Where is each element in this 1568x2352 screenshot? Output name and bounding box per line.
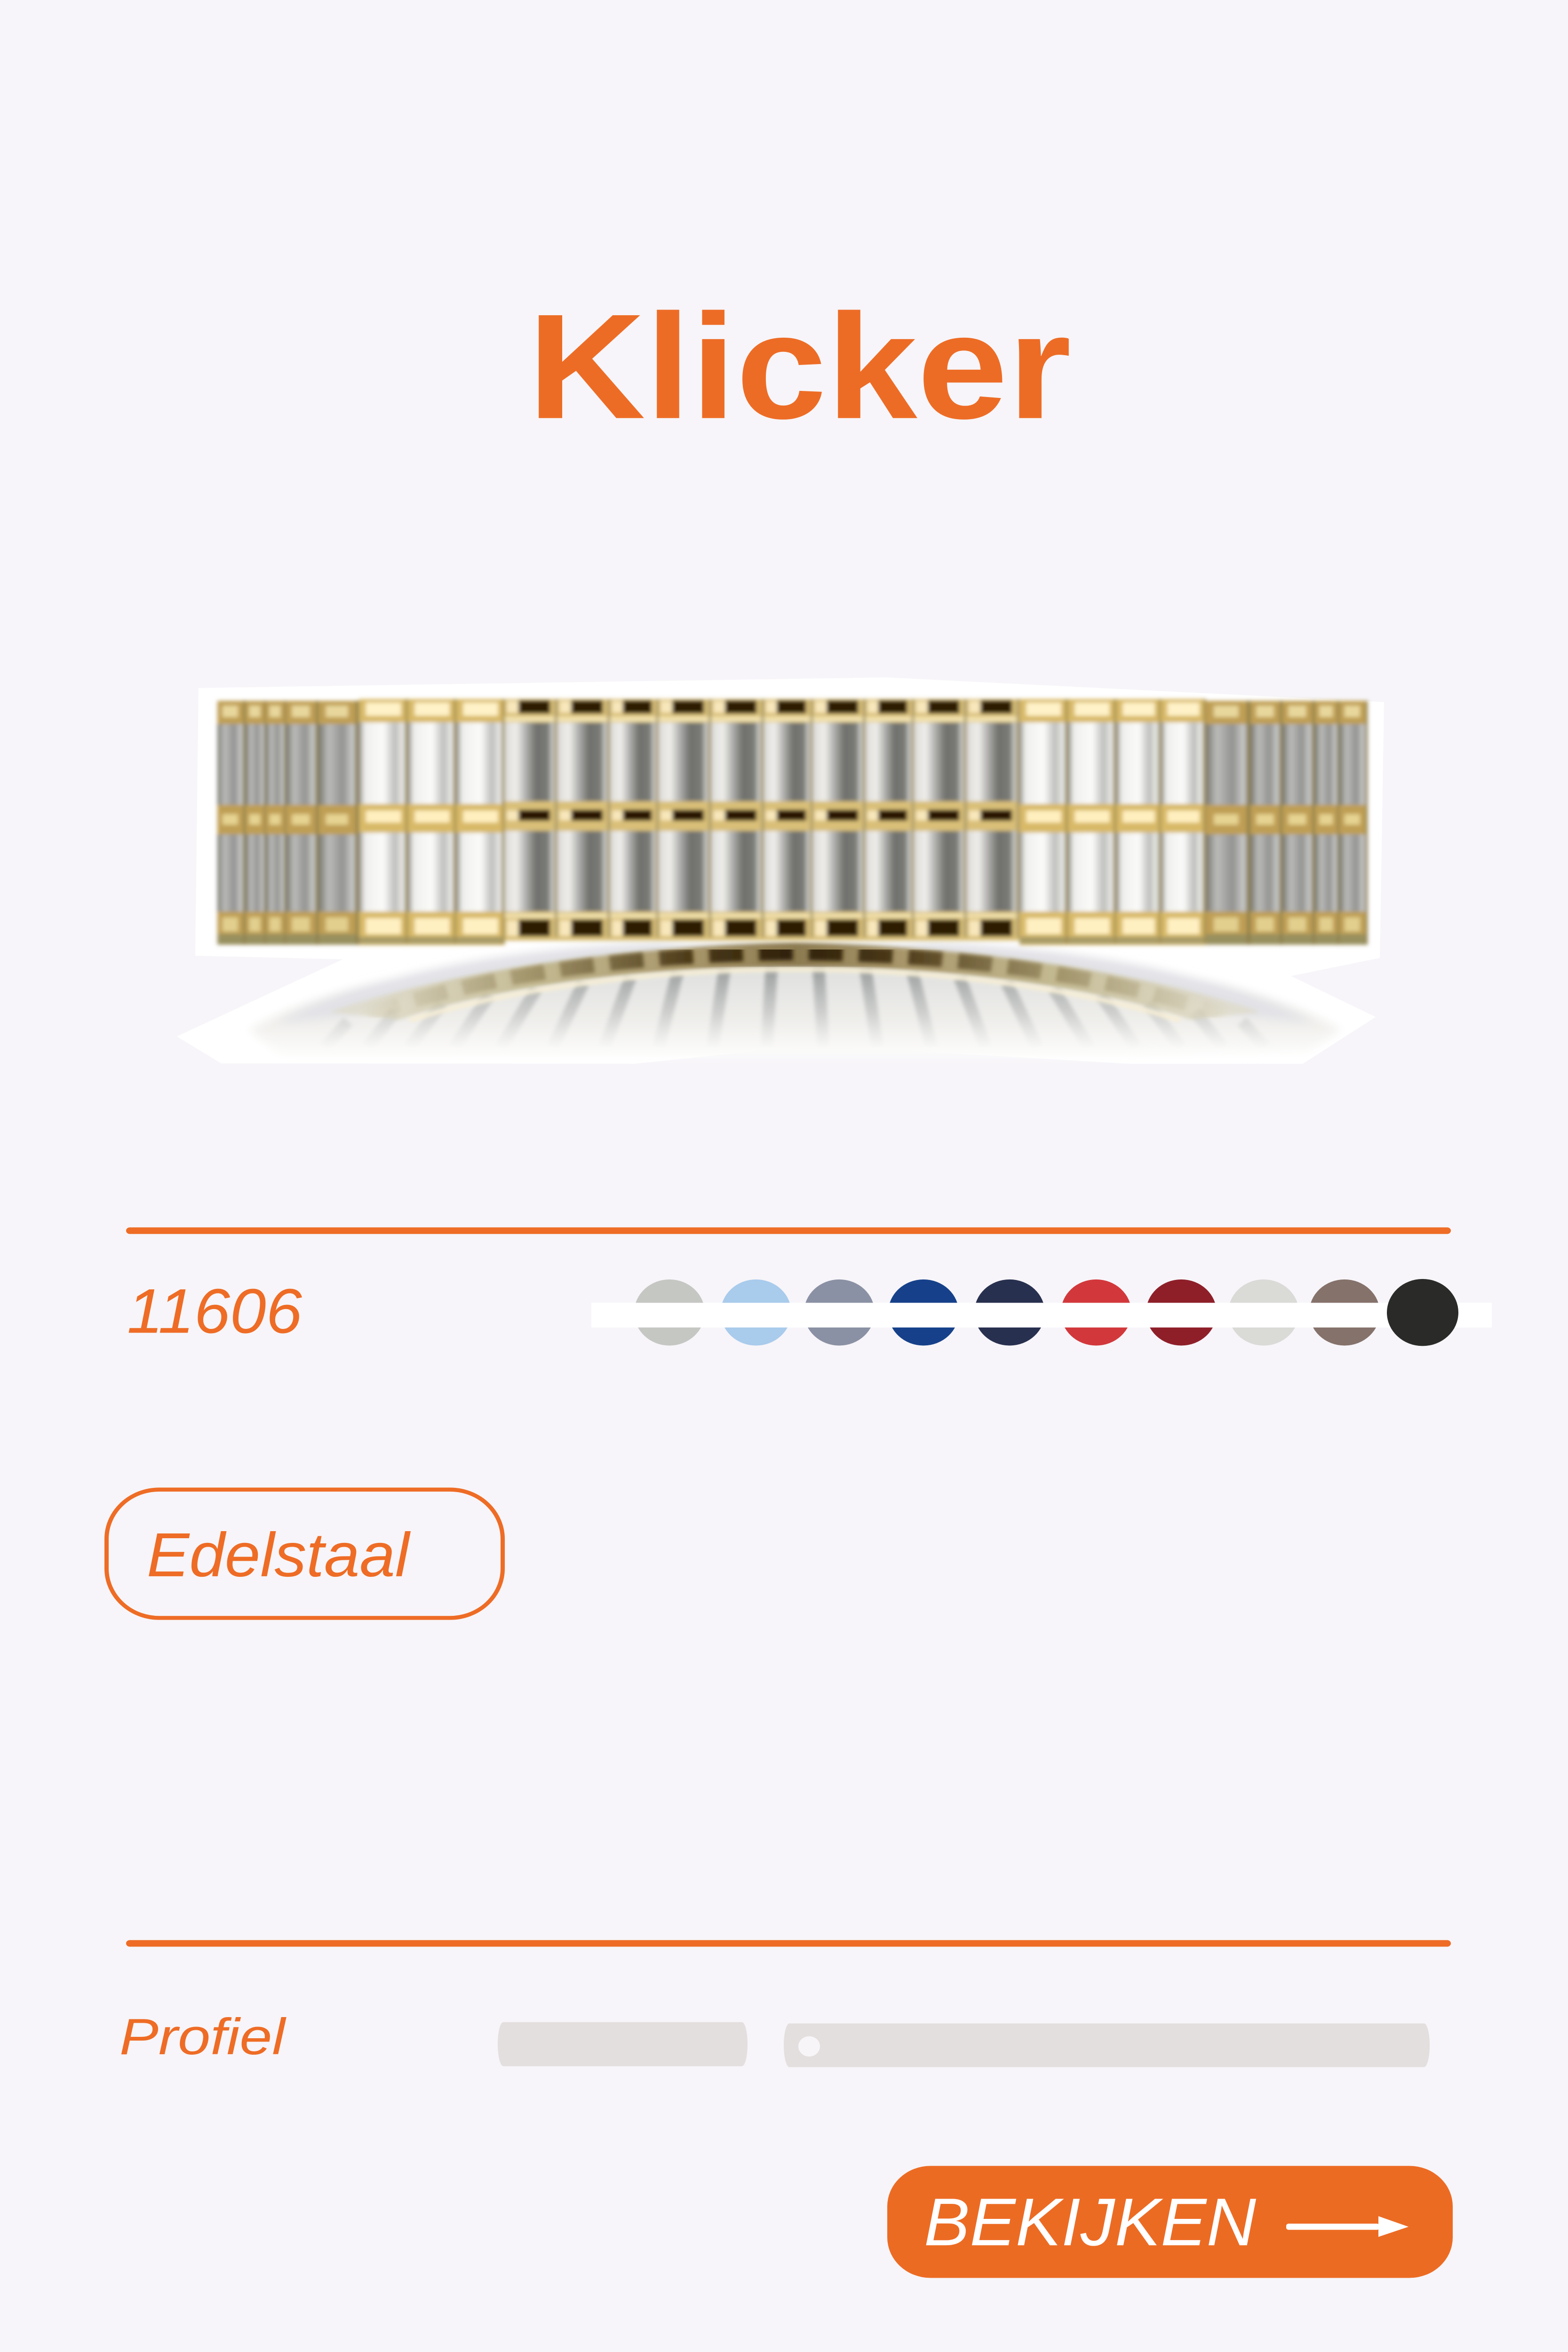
white strip across swatches: [591, 1303, 1492, 1327]
divider line: bottom: [126, 1940, 1451, 1947]
band links: [217, 699, 1368, 945]
profile placeholder: small: [498, 2022, 748, 2066]
swatch: silver grey: [634, 1279, 705, 1345]
swatch: dark red: [1146, 1279, 1217, 1345]
swatch: blue grey: [804, 1279, 875, 1345]
swatch: light blue: [721, 1279, 791, 1345]
swatch: taupe: [1309, 1279, 1380, 1345]
material tag: Edelstaal: [147, 1520, 411, 1589]
button: BEKIJKEN: [924, 2185, 1257, 2260]
swatch: pale grey: [1228, 1279, 1299, 1345]
swatch: navy: [974, 1279, 1045, 1345]
white cut-out background: [177, 677, 1384, 1064]
swatch: black: [1387, 1279, 1458, 1346]
title: Klicker: [528, 283, 1071, 450]
article number: 11606: [127, 1276, 302, 1346]
reflection of the band: [249, 943, 1341, 1056]
divider line: top: [126, 1227, 1451, 1234]
profile label: Profiel: [119, 2008, 287, 2065]
material tag: [106, 1490, 502, 1618]
profile placeholder: large with dot: [784, 2024, 1430, 2067]
colour swatches: [591, 1279, 1492, 1346]
product image: two-tone expansion watch band with reflection: [177, 677, 1384, 1064]
icon: arrow: [1286, 2216, 1409, 2237]
swatch: red: [1061, 1279, 1131, 1345]
swatch: royal blue: [888, 1279, 959, 1345]
button: [887, 2166, 1453, 2278]
